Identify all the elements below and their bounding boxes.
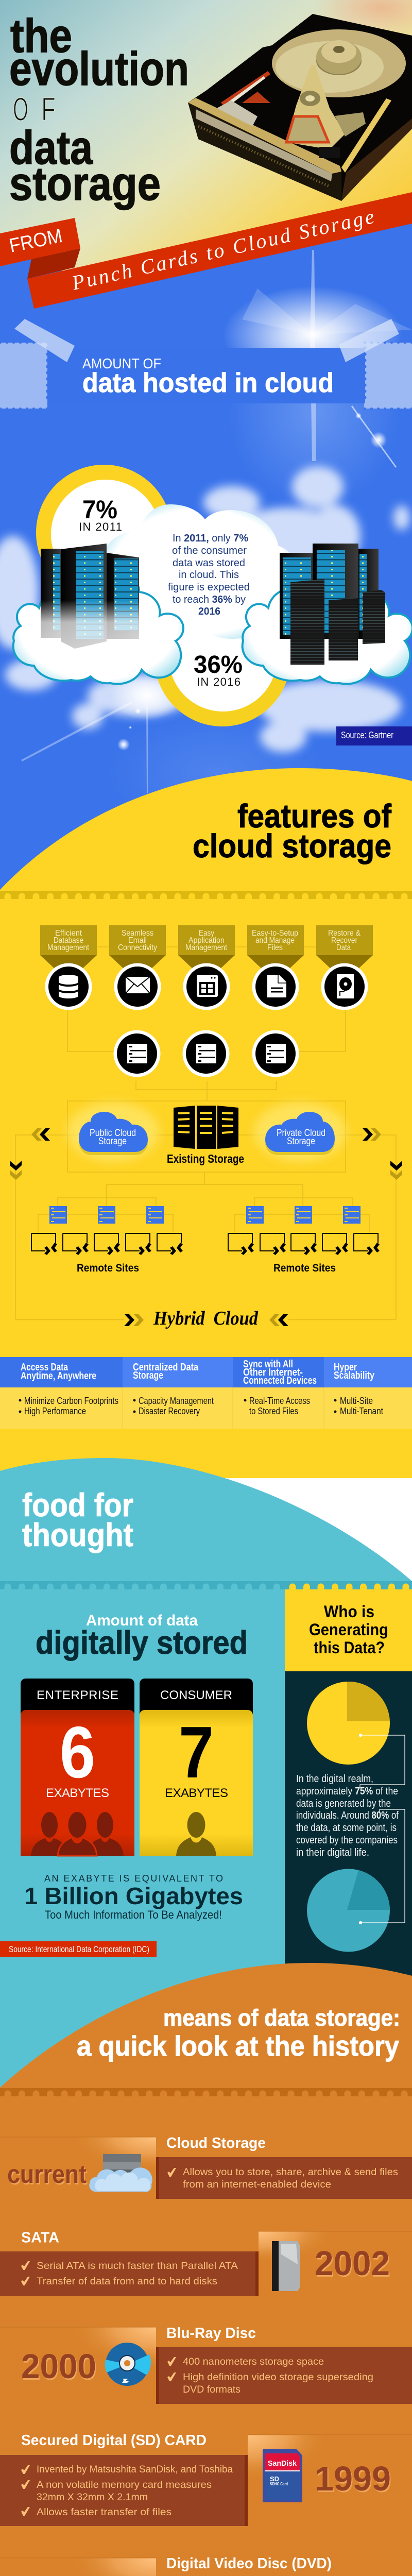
card: consumer 7 exabytes: EXABYTES <box>165 1786 228 1800</box>
orange section background <box>0 1963 412 2576</box>
column: access data: Access Data <box>21 1362 68 1373</box>
heading: means of data storage <box>77 2005 400 2062</box>
teal section background <box>0 1458 412 2096</box>
feature: restore and recover data: Recover <box>331 936 358 945</box>
timeline: sata, 2002: Transfer of data from and to hard disks <box>37 2276 217 2287</box>
benefits table <box>0 1357 412 1429</box>
column: sync: Sync with All <box>243 1359 293 1370</box>
feature: easy application management <box>178 925 235 1010</box>
explanation text: In the digital realm, <box>296 1773 373 1785</box>
public cloud <box>79 1112 148 1155</box>
oval: 7% in 2011: IN 2011 <box>79 520 122 533</box>
yellow section background <box>0 768 412 1478</box>
timeline: sd card, 1999 <box>0 2432 412 2526</box>
feature: easy-to-setup and manage files <box>247 925 304 1010</box>
title: data <box>9 122 93 174</box>
explanation text: individuals. Around 80% of <box>296 1810 399 1821</box>
feature: easy application management: Application <box>188 936 225 945</box>
oval: 36% in 2016: IN 2016 <box>197 675 241 688</box>
icon: three people <box>31 1812 124 1856</box>
feature: easy application management: Easy <box>199 929 214 938</box>
timeline: cloud storage, current: from an internet-enabled device <box>183 2179 331 2190</box>
card: enterprise 6 exabytes: 6 <box>60 1711 95 1793</box>
ribbon: from punch cards to cloud storage: FROM <box>7 225 64 257</box>
timeline: blu-ray disc, 2000: DVD formats <box>183 2384 241 2395</box>
source: gartner <box>336 726 412 745</box>
column: hyper scalability: Multi-Tenant <box>340 1406 383 1416</box>
ribbon: from punch cards to cloud storage <box>0 192 412 309</box>
left server cloud <box>13 544 183 684</box>
feature: efficient database management <box>40 925 97 1010</box>
cloud callout text: of the consumer <box>172 545 247 556</box>
remote sites: left group <box>31 1233 183 1274</box>
right server cloud <box>243 544 412 684</box>
feature: easy-to-setup and manage files: Easy-to-Setup <box>252 929 298 938</box>
timeline: blu-ray disc, 2000: Blu-Ray Disc <box>166 2325 256 2342</box>
remote sites: right group <box>228 1233 380 1274</box>
pie chart: companies 80% <box>307 1869 390 1952</box>
sky background <box>0 196 412 896</box>
illustration: open hard disk drive <box>188 14 412 201</box>
cloud callout text: data was stored <box>173 557 245 569</box>
connectors between feature boxes <box>15 947 396 1320</box>
timeline: blu-ray disc, 2000 <box>0 2325 412 2404</box>
heading: features of cloud storage: features of <box>237 798 392 835</box>
title: evolution <box>9 43 189 95</box>
column: hyper scalability: Scalability <box>334 1370 375 1381</box>
heading: features of cloud storage: cloud storage <box>193 827 391 865</box>
column: centralized storage <box>133 1362 214 1416</box>
feature: easy-to-setup and manage files: Files <box>267 943 283 952</box>
explanation text: the data, at some point, is <box>296 1822 397 1834</box>
oval: 36% in 2016 <box>154 590 290 726</box>
feature: efficient database management: Management <box>47 943 89 952</box>
heading: food for thought: food for <box>22 1487 133 1523</box>
card: enterprise 6 exabytes: EXABYTES <box>46 1786 109 1800</box>
private cloud: Storage <box>287 1136 315 1147</box>
timeline: dvd, 1995: Digital Video Disc (DVD) <box>166 2555 332 2572</box>
column: hyper scalability: Multi-Site <box>340 1396 373 1406</box>
column: centralized storage: Disaster Recovery <box>139 1406 200 1416</box>
column: access data: Minimize Carbon Footprints <box>24 1396 118 1406</box>
arrows around existing storage <box>10 1128 402 1180</box>
leader lines <box>359 1734 405 1924</box>
feature: restore and recover data <box>316 925 373 1010</box>
exabyte equivalence: Too Much Information To Be Analyzed! <box>45 1908 222 1921</box>
hero textured background <box>0 0 412 276</box>
heading: means of data storage: means of data storage: <box>163 2005 400 2031</box>
icon: one person <box>176 1812 216 1856</box>
column: access data: Anytime, Anywhere <box>21 1370 96 1382</box>
timeline: sd card, 1999: 32mm X 32mm X 2.1mm <box>37 2492 148 2503</box>
title: O <box>13 91 28 128</box>
column: sync: Other Internet- <box>243 1367 303 1378</box>
feature: restore and recover data: Restore & <box>328 929 360 938</box>
column: sync: Connected Devices <box>243 1375 317 1386</box>
icon: sd card <box>263 2449 302 2502</box>
column: sync: Real-Time Access <box>249 1396 310 1406</box>
public cloud: Storage <box>98 1136 127 1147</box>
explanation text: approximately 75% of the <box>296 1786 398 1797</box>
heading: features of cloud storage <box>193 798 392 865</box>
public cloud: Public Cloud <box>90 1128 136 1139</box>
remote sites: left group: Remote Sites <box>77 1262 139 1274</box>
timeline: sata, 2002 <box>0 2230 412 2296</box>
timeline: blu-ray disc, 2000: High definition video storage superseding <box>183 2372 373 2383</box>
explanation text <box>296 1773 399 1858</box>
timeline: sata, 2002: SATA <box>21 2230 59 2246</box>
feature: seamless email connectivity: Email <box>128 936 147 945</box>
feature: efficient database management: Efficient <box>55 929 82 938</box>
column: access data: High Performance <box>24 1406 86 1416</box>
timeline: sata, 2002: Serial ATA is much faster than Parallel ATA <box>37 2261 238 2272</box>
cloud callout text: in cloud. This <box>179 569 239 581</box>
title: F <box>41 91 56 128</box>
cloud callout text: In 2011, only 7% <box>173 533 248 544</box>
card: enterprise 6 exabytes: ENTERPRISE <box>37 1688 118 1702</box>
icon: sd card: SDHC Card <box>270 2482 288 2486</box>
feature: seamless email connectivity <box>109 925 166 1010</box>
column: hyper scalability <box>334 1362 383 1416</box>
timeline: cloud storage, current: Allows you to store, share, archive & send files <box>183 2167 398 2178</box>
feature: easy-to-setup and manage files: and Manage <box>255 936 295 945</box>
column: access data <box>19 1362 118 1416</box>
oval: 36% in 2016: 36% <box>194 651 243 679</box>
panel: who is generating this data: this Data? <box>314 1638 385 1657</box>
cloud callout text: to reach 36% by <box>173 594 246 605</box>
heading: amount of data digitally stored <box>36 1612 248 1661</box>
remote sites: right group: Remote Sites <box>273 1262 336 1274</box>
title <box>9 10 189 210</box>
title: storage <box>9 158 161 210</box>
heading: food for thought: thought <box>22 1517 133 1553</box>
timeline: sd card, 1999: Allows faster transfer of files <box>37 2507 171 2518</box>
icon: hard drive <box>272 2241 300 2291</box>
heading banner: amount of data hosted in cloud: data hosted in cloud <box>82 368 334 398</box>
explanation text: in their digital life. <box>296 1847 369 1858</box>
heading banner: amount of data hosted in cloud <box>0 319 412 409</box>
source: international data corporation: Source: International Data Corporation (IDC) <box>9 1944 149 1954</box>
timeline: sd card, 1999: 1999 <box>315 2460 391 2498</box>
timeline: sd card, 1999: Invented by Matsushita SanDisk, and Toshiba <box>37 2464 233 2475</box>
column: centralized storage: Centralized Data <box>133 1362 199 1373</box>
timeline: cloud storage, current <box>0 2135 412 2199</box>
existing storage panel <box>67 1102 347 1165</box>
panel: who is generating this data: Generating <box>309 1620 388 1639</box>
column: centralized storage: Capacity Management <box>139 1396 214 1406</box>
private cloud <box>265 1112 335 1155</box>
exabyte equivalence: AN EXABYTE IS EQUIVALENT TO <box>44 1873 223 1884</box>
heading: food for thought <box>22 1487 133 1553</box>
existing storage icon <box>174 1106 238 1149</box>
timeline: blu-ray disc, 2000: 400 nanometers storage space <box>183 2357 324 2367</box>
icon: sd card: SanDisk <box>268 2459 297 2468</box>
timeline: sd card, 1999: A non volatile memory card measures <box>37 2480 212 2490</box>
cloud callout text <box>105 504 294 639</box>
explanation text: data is generated by the <box>296 1798 391 1809</box>
timeline: dvd, 1995 <box>0 2555 412 2576</box>
timeline: cloud storage, current: current <box>7 2160 87 2189</box>
title: the <box>10 10 72 62</box>
column: centralized storage: Storage <box>133 1370 163 1381</box>
feature: restore and recover data: Data <box>336 943 351 952</box>
icon: sd card: SD <box>270 2475 279 2483</box>
card: consumer 7 exabytes: CONSUMER <box>160 1688 232 1702</box>
source: international data corporation <box>0 1941 157 1957</box>
existing storage panel: Existing Storage <box>167 1152 244 1165</box>
feature: easy application management: Management <box>185 943 227 952</box>
oval: 7% in 2011 <box>36 465 172 601</box>
pie chart: individuals 75% <box>307 1682 390 1765</box>
column: sync <box>243 1359 317 1416</box>
cloud callout text: 2016 <box>198 606 220 617</box>
hybrid cloud label: Hybrid Cloud <box>153 1308 259 1329</box>
timeline: sata, 2002: 2002 <box>315 2244 390 2283</box>
server nodes row <box>113 1030 299 1077</box>
feature: seamless email connectivity: Seamless <box>122 929 153 938</box>
heading: amount of data digitally stored: digitally stored <box>36 1625 248 1661</box>
card: consumer 7 exabytes <box>140 1679 253 1856</box>
feature: efficient database management: Database <box>54 936 83 945</box>
panel: who is generating this data: Who is <box>324 1602 374 1621</box>
card: enterprise 6 exabytes <box>21 1679 134 1856</box>
heading banner: amount of data hosted in cloud: AMOUNT OF <box>82 355 161 371</box>
icon: servers in cloud <box>89 2154 152 2192</box>
private cloud: Private Cloud <box>277 1128 325 1139</box>
exabyte equivalence <box>24 1873 243 1921</box>
timeline: cloud storage, current: Cloud Storage <box>166 2135 266 2151</box>
exabyte equivalence: 1 Billion Gigabytes <box>24 1883 243 1909</box>
timeline: sd card, 1999: Secured Digital (SD) CARD <box>21 2432 207 2449</box>
panel: who is generating this data <box>285 1581 412 1986</box>
ribbon: from punch cards to cloud storage: Punch Cards to Cloud Storage <box>69 205 376 295</box>
cloud callout text: figure is expected <box>168 582 250 593</box>
feature: seamless email connectivity: Connectivity <box>118 943 157 952</box>
oval: 7% in 2011: 7% <box>82 495 117 524</box>
column: sync: to Stored Files <box>249 1406 298 1416</box>
remote site servers <box>49 1206 360 1224</box>
column: hyper scalability: Hyper <box>334 1362 357 1373</box>
card: consumer 7 exabytes: 7 <box>179 1711 214 1793</box>
source: gartner: Source: Gartner <box>341 730 393 740</box>
heading: amount of data digitally stored: Amount of data <box>86 1612 198 1629</box>
timeline: blu-ray disc, 2000: 2000 <box>21 2347 96 2386</box>
icon: blu-ray disc <box>105 2343 151 2386</box>
